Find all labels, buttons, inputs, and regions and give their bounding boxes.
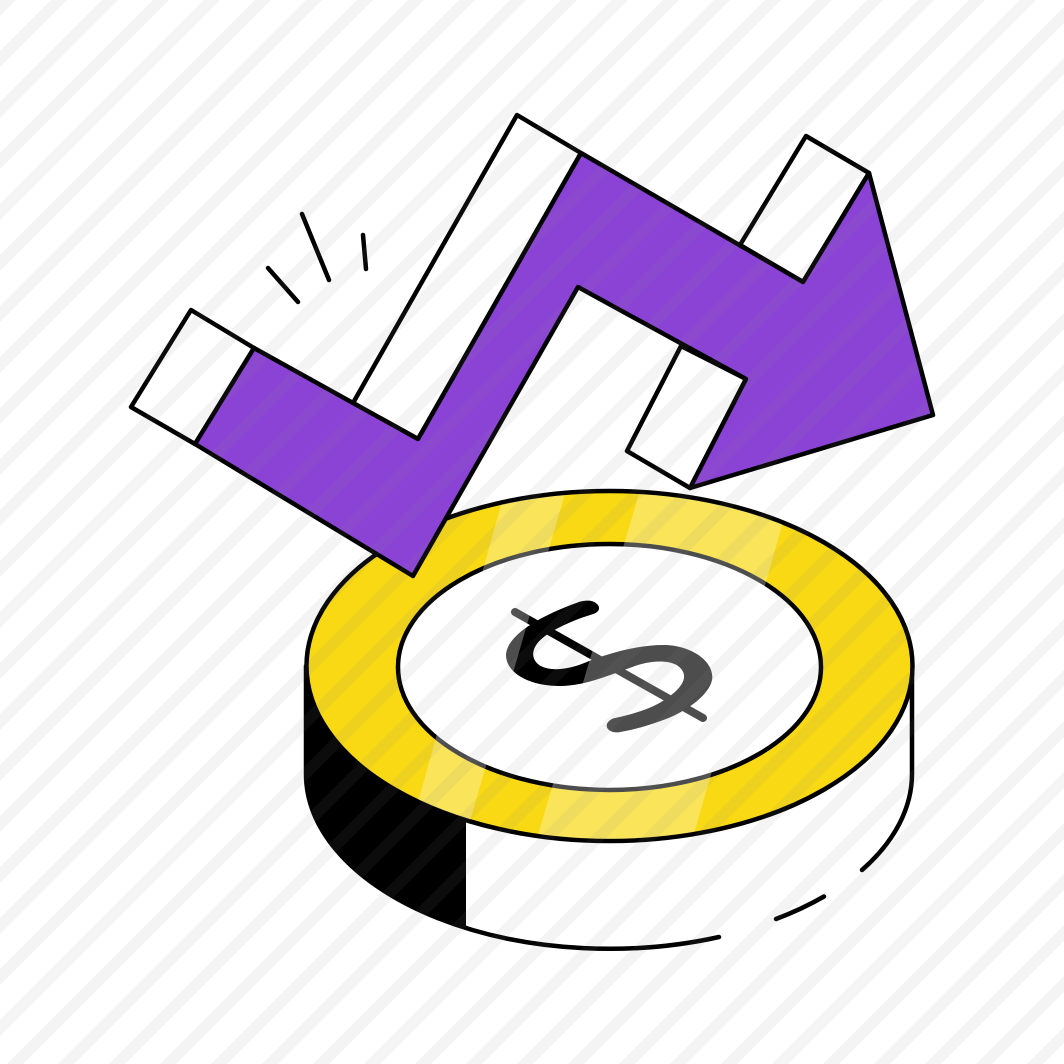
icon: dollar sign xyxy=(506,601,712,732)
arrow back: lower white block xyxy=(627,346,746,488)
coin face: yellow rim xyxy=(306,491,912,841)
arrow back: tall white block xyxy=(353,115,581,439)
dollar sign: diagonal bar xyxy=(515,612,703,718)
coin face: white centre xyxy=(398,544,821,790)
spark ticks xyxy=(268,214,366,302)
glass highlight bands xyxy=(418,494,782,839)
coin xyxy=(306,480,913,949)
coin side: white edge xyxy=(306,666,913,948)
arrow back: upper right white block xyxy=(740,136,869,282)
zigzag arrow xyxy=(131,115,933,576)
arrow back: left white block xyxy=(131,310,254,444)
dollar sign: curved stroke xyxy=(506,601,712,732)
arrow front: purple zigzag xyxy=(195,153,933,576)
coin side: broken outline xyxy=(306,666,912,949)
coin side: black shaded edge xyxy=(306,666,466,927)
